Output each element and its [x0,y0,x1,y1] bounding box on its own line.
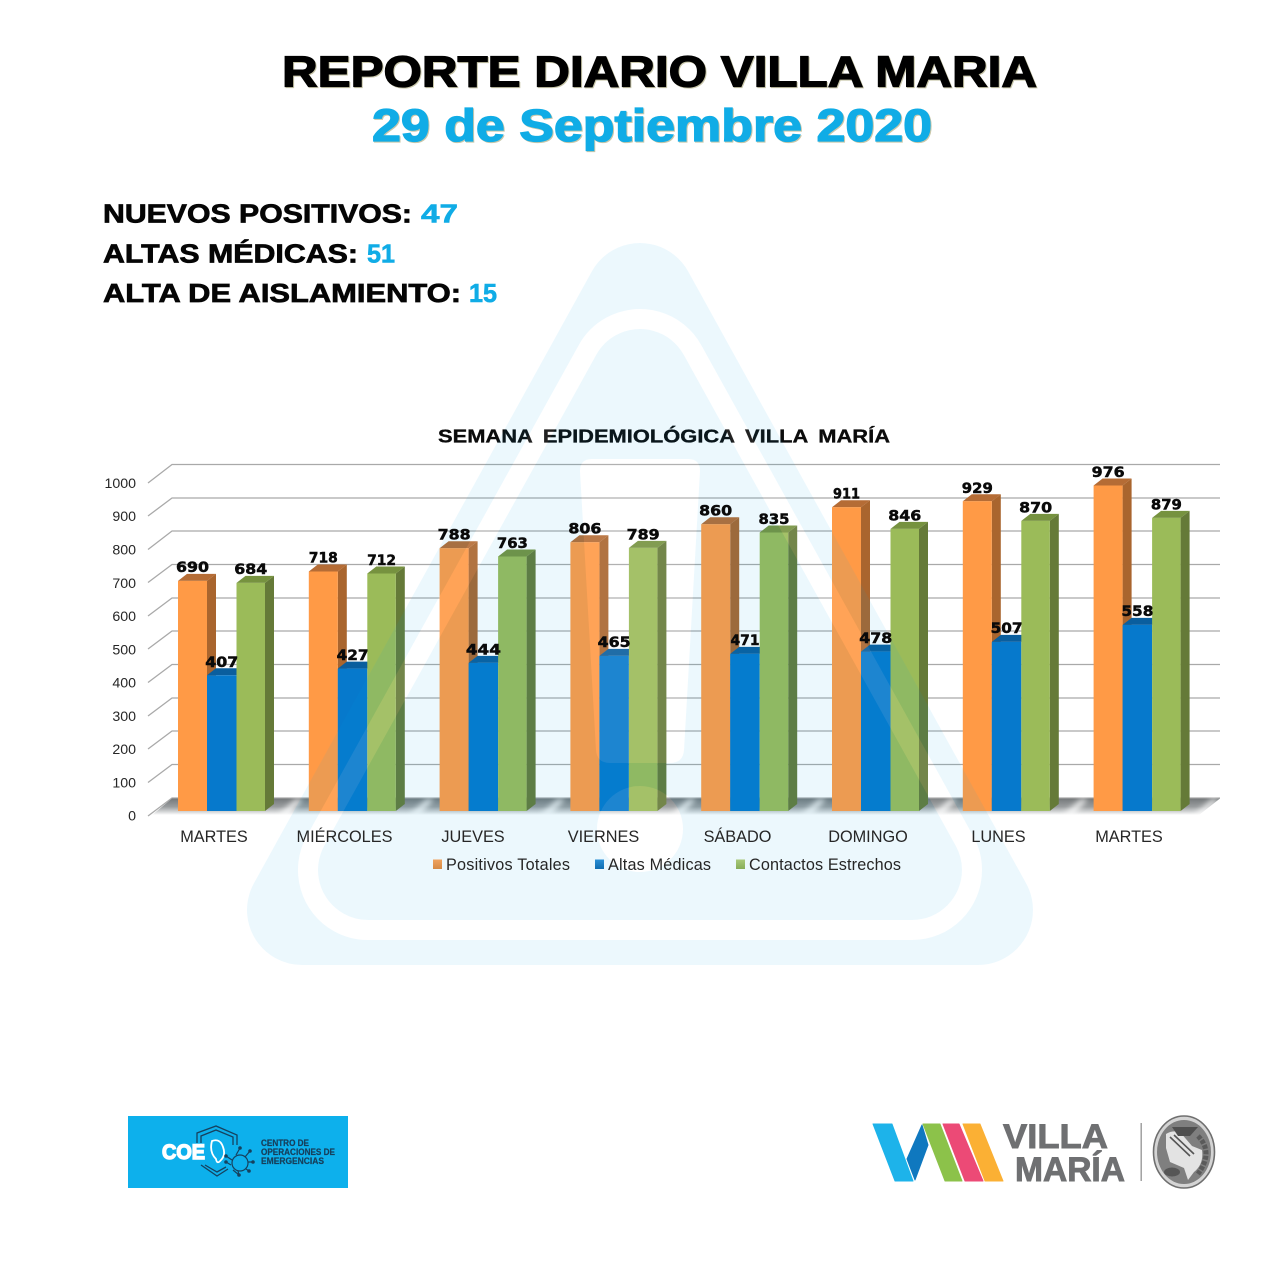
data labels: 846 [888,508,921,524]
logo: COE: EMERGENCIAS [261,1156,324,1166]
x axis labels: DOMINGO [828,828,908,846]
title: REPORTE DIARIO VILLA MARIA [282,48,1037,96]
data labels: 911 [833,486,860,502]
logo: COE [128,1116,348,1188]
data labels: 788 [438,526,471,544]
x axis labels: LUNES [971,828,1026,846]
x axis labels: SÁBADO [704,827,771,846]
data labels: 835 [758,511,790,528]
logo: Villa María: VILLA [1003,1118,1108,1156]
data labels: 507 [991,620,1023,637]
y axis labels: 500 [112,642,136,658]
data labels: 718 [309,550,338,566]
chart gridlines and axis [148,464,1220,816]
x axis labels: MARTES [180,828,248,846]
logo: COE: CENTRO DE [261,1138,309,1148]
y axis labels: 400 [112,676,136,692]
x axis labels: VIERNES [568,828,639,846]
daily summary figures: 51 [367,240,395,268]
y axis labels: 800 [112,542,136,558]
data labels: 929 [962,480,993,497]
data labels: 976 [1092,464,1125,481]
y axis labels [104,476,136,824]
watermark: warning triangle [247,243,1033,965]
y axis labels: 200 [112,742,136,758]
logo: municipal seal [1154,1116,1214,1188]
y axis labels: 700 [112,576,136,592]
data labels: 763 [497,535,528,552]
chart title: SEMANA EPIDEMIOLÓGICA VILLA MARÍA [438,426,890,446]
data labels: 427 [337,647,369,664]
y axis labels: 0 [128,808,136,824]
bars: LUNES [963,494,1059,811]
floor shadow [152,798,1220,815]
bars: MIÉRCOLES [309,564,405,811]
daily summary figures [103,200,497,308]
data labels: 471 [730,632,760,649]
daily summary figures: NUEVOS POSITIVOS: [103,200,412,228]
y axis labels: 1000 [104,476,136,492]
y axis labels: 600 [112,609,136,625]
bars: MARTES [178,574,274,811]
legend [433,856,901,874]
legend: Contactos Estrechos [749,856,901,874]
logo: COE: COE [162,1141,205,1164]
legend: Altas Médicas [608,856,711,874]
data labels [176,464,1182,671]
legend: Positivos Totales [446,856,570,874]
x axis labels [180,827,1163,846]
data labels: 444 [466,642,501,658]
data labels: 879 [1151,496,1182,514]
x axis labels: MARTES [1095,828,1163,846]
data labels: 478 [859,630,892,647]
data labels: 870 [1019,500,1052,516]
data labels: 806 [568,520,601,538]
y axis labels: 100 [112,776,136,792]
x axis labels: JUEVES [441,828,505,846]
daily summary figures: 47 [421,200,458,228]
logo: Villa María: MARÍA [1015,1151,1125,1189]
logo: Villa María [873,1118,1142,1189]
logo: COE: OPERACIONES DE [261,1147,335,1157]
daily summary figures: ALTAS MÉDICAS: [103,240,358,268]
bars: MARTES final [1094,478,1190,811]
data labels: 465 [598,634,631,651]
bars: SÁBADO [701,517,797,811]
daily summary figures: 15 [469,280,497,308]
data labels: 690 [176,559,209,576]
data labels: 860 [699,502,732,520]
x axis labels: MIÉRCOLES [297,827,393,846]
bars: VIERNES [570,535,666,811]
daily summary figures: ALTA DE AISLAMIENTO: [103,280,461,308]
data labels: 558 [1121,603,1153,620]
bars: JUEVES [440,541,536,811]
y axis labels: 300 [112,709,136,725]
title [282,48,1037,151]
data labels: 712 [367,552,396,569]
data labels: 407 [205,654,238,671]
title: 29 de Septiembre 2020 [372,100,932,151]
y axis labels: 900 [112,509,136,525]
data labels: 684 [234,561,267,578]
data labels: 789 [627,526,660,544]
bars: DOMINGO [832,500,928,811]
